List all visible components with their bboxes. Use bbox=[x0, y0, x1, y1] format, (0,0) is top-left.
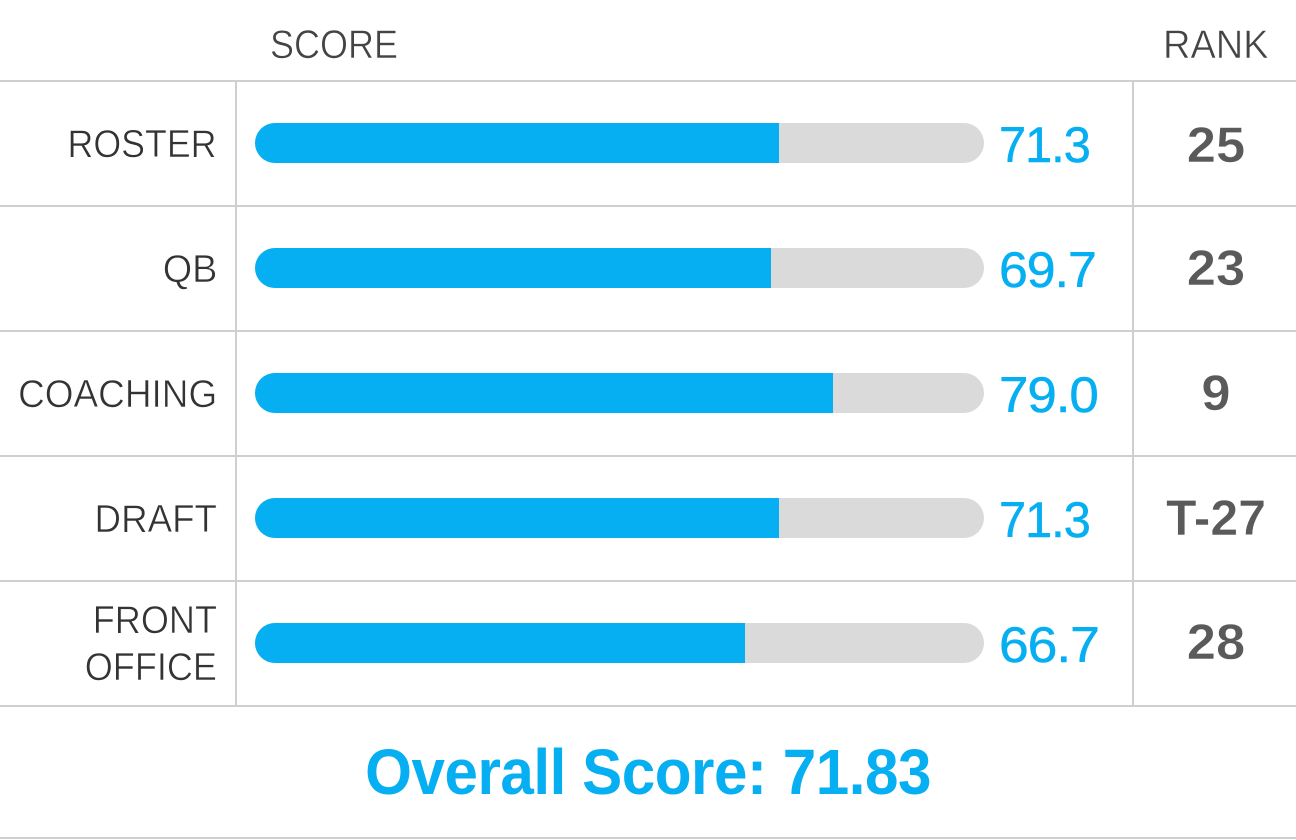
draft bar bbox=[255, 498, 984, 538]
draft label: DRAFT bbox=[95, 498, 217, 541]
draft score: 71.3 bbox=[999, 492, 1090, 548]
roster bar bbox=[255, 123, 984, 163]
coaching label: COACHING bbox=[18, 373, 217, 416]
row: front office bbox=[85, 599, 1245, 689]
coaching rank: 9 bbox=[1201, 365, 1231, 421]
column heading: score: SCORE bbox=[270, 23, 398, 67]
overall score: Overall Score: 71.83 bbox=[365, 736, 931, 808]
front office bar bbox=[255, 623, 984, 663]
coaching bar bbox=[255, 373, 984, 413]
column heading: rank: RANK bbox=[1163, 23, 1269, 67]
qb bar bbox=[255, 248, 984, 288]
front office score: 66.7 bbox=[999, 617, 1099, 673]
front office label: OFFICE bbox=[85, 646, 217, 689]
row: coaching bbox=[18, 365, 1231, 423]
row: qb bbox=[162, 240, 1245, 298]
front office rank: 28 bbox=[1187, 614, 1245, 670]
qb label: QB bbox=[162, 248, 217, 291]
qb rank: 23 bbox=[1187, 240, 1245, 296]
roster label: ROSTER bbox=[68, 123, 217, 166]
roster rank: 25 bbox=[1187, 117, 1245, 173]
front office label: FRONT bbox=[93, 599, 217, 642]
front office label bbox=[85, 599, 217, 689]
row: draft bbox=[95, 490, 1266, 548]
coaching score: 79.0 bbox=[999, 367, 1098, 423]
draft rank: T-27 bbox=[1166, 490, 1266, 546]
qb score: 69.7 bbox=[999, 242, 1096, 298]
row: roster bbox=[68, 117, 1245, 173]
roster score: 71.3 bbox=[999, 117, 1090, 173]
